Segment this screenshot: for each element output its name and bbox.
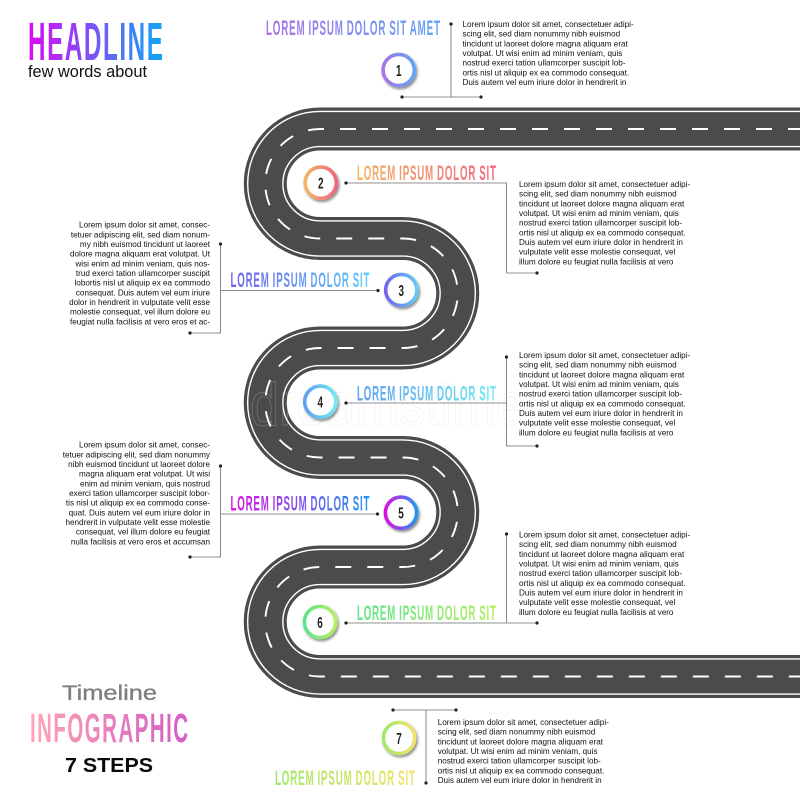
step 5 badge: 5 [398,506,404,522]
step 2 text: Lorem ipsum dolor sit amet, consectetuer adipi- [519,180,690,189]
label: timeline: Timeline [62,682,157,705]
bottom title block [30,682,190,777]
step 5 text: hendrerit in vulputate velit esse molestie [65,518,210,527]
step 6 text: nostrud exerci tation ullamcorper suscipit lob- [519,569,682,578]
step 5 text: nulla facilisis at vero eros et accumsan [71,537,210,546]
step 2 text: nostrud exerci tation ullamcorper suscipit lob- [519,219,682,228]
step 6 badge: 6 [317,615,323,632]
step 4 text: Duis autem vel eum iriure dolor in hendrerit in [519,409,683,418]
step 3 text: tetuer adipiscing elit, sed diam nonum- [71,230,210,239]
step 2 text: vulputate velit esse molestie consequat, vel [519,248,675,257]
step 1 text: scing elit, sed diam nonummy nibh euismod [462,30,620,39]
step 5 text: tis nisl ut aliquip ex ea commodo conse- [66,499,210,508]
step 7 text: Duis autem vel eum iriure dolor in hendrerit in [438,776,602,785]
step 5 text: nibh euismod tincidunt ut laoreet dolore [68,460,210,469]
step 3 text: dolore magna aliquam erat volutpat. Ut [70,250,211,259]
step 1 connector [400,22,483,99]
step 4 text: volutpat. Ut wisi enim ad minim veniam, quis [519,380,679,389]
step 2 badge: 2 [318,176,324,192]
step 6 [304,530,690,638]
step 3 text: trud exerci tation ullamcorper suscipit [76,269,211,278]
title: headline [28,12,164,81]
step 6 connector [344,532,539,625]
step 3 text: wisi enim ad minim veniam, quis nos- [74,259,210,268]
step 2 text: scing elit, sed diam nonummy nibh euismod [519,190,677,199]
step 2 text [519,180,690,266]
step 5 text: exerci tation ullamcorper suscipit lobor- [69,489,210,498]
step 3 connector [188,242,380,335]
step 3 text: Lorem ipsum dolor sit amet, consec- [79,221,210,230]
step 6 text: vulputate velit esse molestie consequat, vel [519,598,675,607]
step 4 text: Lorem ipsum dolor sit amet, consectetuer adipi- [519,351,690,360]
step 1 [266,17,634,99]
step 6 text [519,530,690,617]
road [265,129,800,676]
step 5 badge [385,497,417,528]
step 7 text: Lorem ipsum dolor sit amet, consectetuer adipi- [438,718,609,727]
step 4 badge: 4 [318,394,323,412]
step 6 text: ortis nisl ut aliquip ex ea commodo consequat. [519,579,686,588]
step 6: LOREM IPSUM DOLOR SIT [357,602,497,625]
step 5 text: magna aliquam erat volutpat. Ut wisi [79,470,210,479]
step 7 connector [391,708,458,785]
step 4 text [519,351,690,437]
step 6 text: scing elit, sed diam nonummy nibh euismod [519,540,677,549]
step 3 text: lobortis nisl ut aliquip ex ea commodo [74,279,210,288]
step 1 text: tincidunt ut laoreet dolore magna aliquam erat [462,39,629,48]
step 1 badge: 1 [396,63,402,80]
text: HEADLINE [28,12,164,72]
step 3 badge: 3 [399,283,404,300]
step 2 badge [305,167,336,198]
step 2 text: volutpat. Ut wisi enim ad minim veniam, quis [519,209,679,218]
step 7 text: nostrud exerci tation ullamcorper suscipit lob- [438,757,601,766]
step 7 text: volutpat. Ut wisi enim ad minim veniam, quis [438,747,598,756]
label: 7 steps: 7 STEPS [65,754,153,777]
step 4 text: tincidunt ut laoreet dolore magna aliquam erat [519,370,685,379]
step 3 [69,221,417,335]
step 6 badge [304,606,336,638]
step 2 text: tincidunt ut laoreet dolore magna aliquam erat [519,199,685,208]
step 4 badge [305,386,336,417]
step 7 badge [383,722,415,754]
step 3: LOREM IPSUM DOLOR SIT [230,269,370,292]
step 5 text: Lorem ipsum dolor sit amet, consec- [79,441,210,450]
step 7 text: tincidunt ut laoreet dolore magna aliquam erat [438,737,604,746]
step 4 text: nostrud exerci tation ullamcorper suscipit lob- [519,390,682,399]
step 3 text: feugiat nulla facilisis at vero eros et ac- [70,317,210,326]
step 1 badge [383,54,414,86]
step 1 text: Lorem ipsum dolor sit amet, consectetuer adipi- [462,20,634,29]
step 1 text: ortis nisl ut aliquip ex ea commodo consequat. [462,68,629,77]
step 7 badge: 7 [396,731,402,748]
step 7 [275,708,609,790]
step 1 text: volutpat. Ut wisi enim ad minim veniam, quis [462,49,622,58]
step 3 text: consequat. Duis autem vel eum iriure [76,288,210,297]
step 5 text: quat. Duis autem vel eum iriure dolor in [69,508,210,517]
step 2 text: ortis nisl ut aliquip ex ea commodo consequat. [519,228,686,237]
step 6 text: volutpat. Ut wisi enim ad minim veniam, quis [519,560,679,568]
step 2 [305,162,690,275]
step 3 text: my nibh euismod tincidunt ut laoreet [80,240,211,249]
step 4 text: scing elit, sed diam nonummy nibh euismod [519,361,677,370]
step 7 text: scing elit, sed diam nonummy nibh euismod [438,728,595,737]
watermark: dreamstime [250,371,525,438]
step 4: LOREM IPSUM DOLOR SIT [357,382,497,406]
step 3 text: molestie consequat, vel illum dolore eu [70,308,210,317]
step 3 text [69,221,211,326]
subtitle: few words about [28,63,147,81]
step 4 text: vulputate velit esse molestie consequat, vel [519,419,675,428]
step 5: LOREM IPSUM DOLOR SIT [230,492,370,516]
step 7 text [438,718,609,785]
step 4 connector [344,355,539,448]
step 4 text: illum dolore eu feugiat nulla facilisis at vero [519,428,674,437]
step 4 text: ortis nisl ut aliquip ex ea commodo consequat. [519,399,686,408]
step 6 text: tincidunt ut laoreet dolore magna aliquam erat [519,550,685,559]
step 2 text: Duis autem vel eum iriure dolor in hendrerit in [519,238,683,247]
step 1: LOREM IPSUM DOLOR SIT AMET [266,17,441,40]
step 5 text: consequat, vel illum dolore eu feugiat [76,528,211,537]
step 5 text [63,441,211,546]
step 3 badge [386,274,417,306]
step 6 text: illum dolore eu feugiat nulla facilisis at vero [519,608,674,617]
step 2 connector [344,181,539,275]
step 7: LOREM IPSUM DOLOR SIT [275,767,416,790]
step 5 text: enim ad minim veniam, quis nostrud [80,479,210,488]
step 4 [305,351,690,448]
step 1 text [462,20,634,87]
step 6 text: Lorem ipsum dolor sit amet, consectetuer adipi- [519,530,690,540]
step 2 text: illum dolore eu feugiat nulla facilisis at vero [519,257,674,266]
step 5 text: tetuer adipiscing elit, sed diam nonummy [63,450,211,459]
step 6 text: Duis autem vel eum iriure dolor in hendrerit in [519,588,683,598]
step 1 text: nostrud exerci tation ullamcorper suscipit lob- [462,59,626,68]
step 7 text: ortis nisl ut aliquip ex ea commodo consequat. [438,766,604,775]
step 2: LOREM IPSUM DOLOR SIT [357,162,497,185]
step 5 connector [188,464,379,559]
text: INFOGRAPHIC [30,705,190,751]
step 5 [63,441,417,559]
step 3 text: dolor in hendrerit in vulputate velit esse [69,298,210,307]
step 1 text: Duis autem vel eum iriure dolor in hendrerit in [462,78,626,87]
